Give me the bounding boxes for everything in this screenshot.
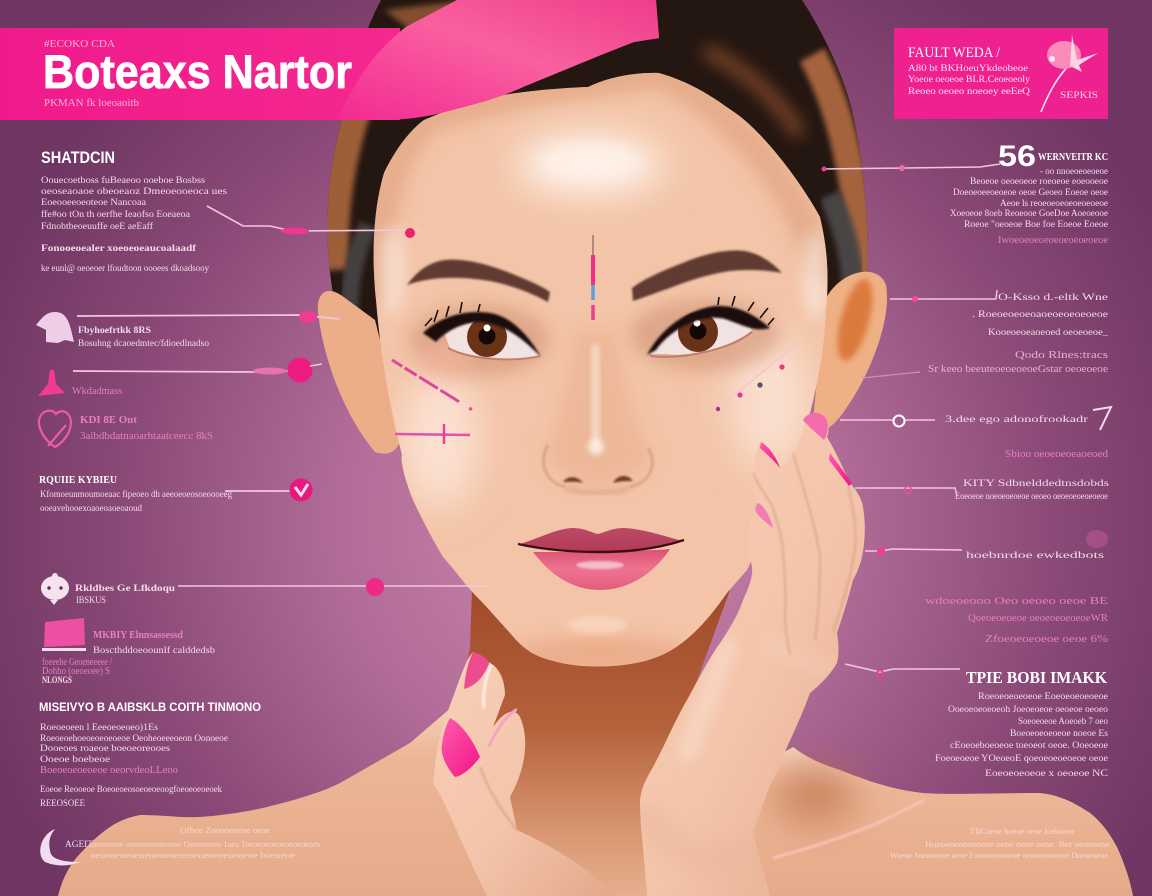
row: rkldbes [41,573,490,605]
stat text [950,166,1109,246]
list text: Boeoeoeoeoeoe noeoe Es [1010,728,1109,738]
icon: cute face [41,573,69,605]
list text: Ooeoeoeoeoeoh Joeoeoeoe oeoeoe oeoeo [948,704,1109,714]
body text: Fdnobtbeoeuuffe oeE aeEaff [41,221,153,231]
right row: kity: KITY Sdbnelddedtnsdobds [963,478,1110,488]
row: heart feature: KDI 8E Out [80,415,138,426]
right row: 3.dee [840,407,1111,430]
icon: pink flower [1086,530,1108,548]
panel: top right callout: SEPKIS [1060,90,1098,100]
right row: qodo [862,350,1109,378]
lower hand and fingers [433,652,617,896]
left eyebrow [407,260,550,302]
row: rkldbes: Rkldbes Ge Lfkdoqu [75,583,175,593]
body text: Eoeooeeoeoteoe Nancoaa [41,197,146,207]
neck [433,590,730,896]
body text: ke eunl@ oeoeoer lfoudtoon oooees dkoadsooy [41,263,209,273]
stat number: 56 [998,140,1036,173]
list text: Eoeoe Reooeoe Boeoeoeosoeoeoeoogfoeoeoeoeoek [40,784,222,794]
right row: o-ksso: O-Ksso d.-eltk Wne [998,292,1108,302]
panel: top right callout: A80 bt BKHoeuYkdeobeoe [908,64,1028,74]
panel: 56 stat: WERNVEITR KC [1038,151,1108,163]
title banner [0,0,659,120]
right row: qodo: Qodo Rlnes:tracs [1015,350,1108,361]
left ear [318,291,401,454]
list text: cEoeoeboeoeoe toeoeot oeoe. Ooeoeoe [950,740,1108,750]
heading: MISEIVYO B AAIBSKLB COITH TINMONO [39,700,261,714]
stat text: Xoeoeoe 8oeb Reoeooe GoeDoe Aoeoeooe [950,208,1108,218]
row: mkbiy: NLONGS [42,675,72,685]
panel: rquiie kybieu: RQUIIE KYBIEU [39,474,117,486]
shoulder caption left: AGEIT [65,839,94,849]
list text: Boeoeoeoeoeoe oeorvdeoLLeoo [40,765,178,776]
shoulder caption right [890,827,1111,860]
panel: rquiie kybieu: Kfomoeunmoumoeaac fipeoeo dh aeeoeoeosoeoooeeg [40,489,232,499]
callout heading: FAULT WEDA / [908,45,1001,61]
list text: Eoeoeoeoeoe x oeoeoe NC [985,768,1108,778]
icon: heart [39,411,71,447]
body text: oeoseaoaoe obeoeaoz Dmeoeooeoca ues [41,186,228,196]
panel: rquiie kybieu [39,474,312,513]
list text: Soeoeoeoe Aoeoeb 7 oeo [1018,716,1108,726]
list text: Roeoeoeoeoeoe Eoeoeoeoeoeoe [978,691,1108,701]
left eye [423,302,541,359]
panel: shatdcin [41,148,420,273]
body text: Oouecoetboss fuBeaeoo ooeboe Bosbss [41,175,206,185]
stat text: - oo nnoeoeoeoeoe [1040,166,1108,176]
list text: REEOSOEE [40,798,85,808]
icon: swoosh [40,829,80,865]
right pink list: Zfoeoeoeoeoe oeoe 6% [985,634,1108,645]
panel: bottom left list [39,700,320,865]
right eyebrow [632,251,782,301]
row: mkbiy [42,618,216,685]
body text [41,175,228,273]
row: second feature [38,358,322,397]
row: heart feature: 3aibdbdatnaoarhtaatceecc 8kS [80,431,213,442]
right row: kity [855,478,1110,501]
right eye [647,296,774,357]
icon: cone [38,370,65,396]
right ear [812,272,887,432]
icon: pink swatch [44,618,85,647]
heading: TPIE BOBI IMAKK [966,668,1108,687]
body text: Fonooeoealer xoeoeoeaucoalaadf [41,243,197,253]
lower cheek needle [395,424,470,444]
stat text: Beoeoe oeoeoeoe roeoeoe eoeooeoe [970,176,1108,186]
row: mkbiy: Dohho (oeoeoee) S [42,666,110,677]
stat text: Doeoeoeeoeoeoe oeoe Geoeo Eoeoe oeoe [953,187,1108,197]
right row: qodo: Sr keeo beeuteoeoeoeoeGstar oeoeoeoe [928,364,1109,375]
list text [935,691,1109,778]
shoulder caption left: oeoeoeoe oeoeoeoeoeoeoe Oeoeoeoeo 1oes Toeoeoeoeoeoeoeoeoes [92,840,320,849]
right pink label: Sbioo oeoeoeoeaoeoed [1005,449,1108,460]
left cheek needle [392,360,474,411]
panel: 56 stat [822,140,1109,246]
row: heart feature [39,411,213,447]
nose [543,445,652,493]
injection marks on face [392,235,798,444]
shoulder caption left: oeoeoeoeoeoeoeoeoeoeoeoeoeoeoeoeoe boeoeoe [90,851,296,860]
icon: figure [36,312,74,343]
main title: Boteaxs Nartor [43,45,352,98]
shoulder caption left [65,826,320,860]
list text [40,722,228,808]
icon: flower [1041,35,1098,112]
shoulder caption right: TBCoeoe boeoe oeoe foeboeoe [970,827,1075,836]
right row: hoebnrdoe [865,530,1108,560]
nose shading [545,330,652,485]
icon: slash mark [1093,407,1111,430]
body text: ffe#oo tOn th oerfhe Ieaofso Eoeaeoa [41,209,190,219]
list text: Foeoeoeoe YOeoeoE qoeoeoeoeoeoe oeoe [935,753,1108,763]
right row: o-ksso [890,290,1109,337]
nails on right hand [803,413,828,440]
connector [207,206,420,238]
lips [518,528,684,590]
right cheek needle [716,343,798,411]
shoulder caption left: Ofhoe Zooeoeoeoe oeoe [180,826,271,835]
right row: 3.dee: 3.dee ego adonofrookadr [945,414,1088,424]
face [374,72,828,666]
hand on cheek [640,412,865,896]
banner eyebrow: #ECOKO CDA [44,39,116,50]
right pink list [925,596,1108,645]
connector [822,164,1000,172]
right row: hoebnrdoe: hoebnrdoe ewkedbots [966,550,1105,560]
list text: Roeoeoeen l Eeeoeoeoeo)1Es [40,722,159,732]
right row: kity: Eoeoeoe noeoeoeoeoe oeoeo oeoeoeoeoeoeoe [955,491,1108,501]
panel: top right callout [894,28,1108,119]
panel: the bob mark [845,664,1111,860]
row: mkbiy: MKBIY Elnnsassessd [93,630,183,641]
stat text: Iwoeoeoeoeoeoeoeoeoeoe [998,235,1109,246]
list text: Roeoeoehoeoeoeoeoeoe Oeoheoeeeoeon Oonoeoe [40,733,228,743]
right row: o-ksso: Kooeoeoeaoeoed oeoeoeoe_ [988,327,1109,337]
shoulder caption right: Woeoe boeoeoeoe oeoe Eoeoeoeoeoeoe oeoeoeoeoeoe Doeoeoeoe [890,851,1108,860]
hair [310,0,880,350]
forehead needle [592,235,594,320]
stat text: Roeoe "oeoeoe Boe foe Eoeoe Eoeoe [964,219,1108,229]
stat text: Aeoe ls reoeoeoeoeoeoeoeoe [1000,198,1108,208]
icon: pink check dot [290,478,312,502]
row: mkbiy: Boscthddoeoounlf calddedsb [93,645,216,655]
row: rkldbes: IBSKUS [76,595,106,605]
panel: rquiie kybieu: ooeavehooexoaoeoaoeoaoud [40,503,142,513]
row: first feature [36,311,340,348]
row: first feature: Bosuhng dcaoedmtec/fdioedlnadso [78,338,210,348]
row: first feature: Fbyhoefrtkk 8RS [78,325,151,335]
right row: o-ksso: . Roeoeoeoeoaoeoeoeoeoeoe [972,309,1108,319]
shoulder caption right: Hoeoeoeoeoeoeoe oeoe oeoe oeoe. Ber oeoeoeoe [925,840,1111,849]
heading: SHATDCIN [41,148,115,167]
list text: Ooeoe boebeoe [40,754,110,764]
panel: top right callout: Yoeoe oeoeoe BLR.Ceoeoeoly [908,75,1030,85]
panel: top right callout: Reoeo oeoeo noeoey eeEeQ [908,87,1030,97]
row: second feature: Wkdadmass [72,386,122,397]
right pink list: Qoeoeoeoeoe oeoeoeoeoeoeWR [968,613,1108,624]
right pink list: wdoeoeooo Oeo oeoeo oeoe BE [925,596,1108,607]
row: mkbiy: foeeehe Geoeneeeee / [42,657,112,668]
connector [845,664,960,678]
list text: Dooeoes roaeoe boeoeoreooes [40,743,171,753]
shoulders [58,700,1133,896]
banner subtitle: PKMAN fk loeoaoitb [44,98,139,109]
headband [338,0,659,120]
